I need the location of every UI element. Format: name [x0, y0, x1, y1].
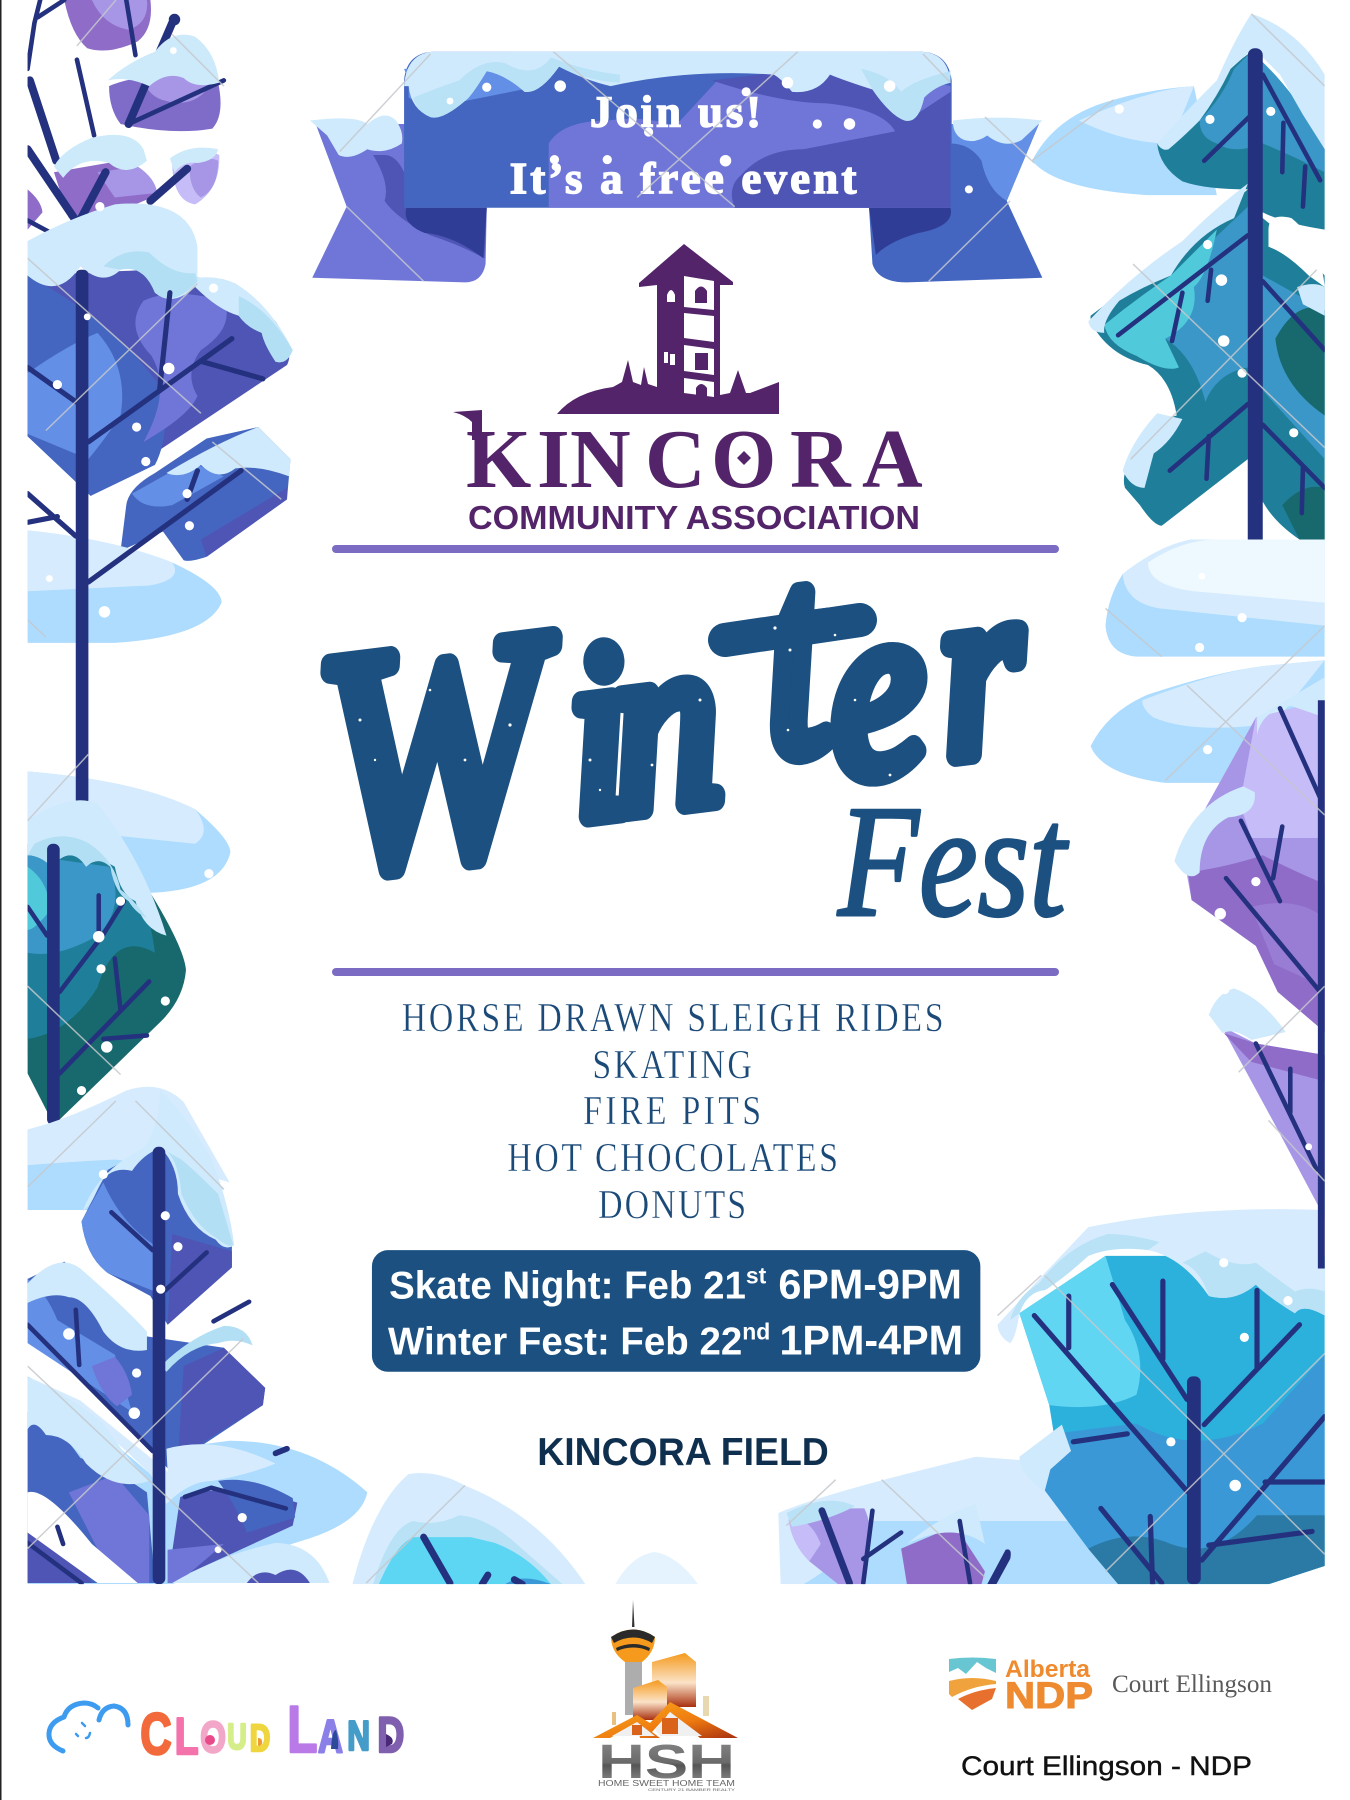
- tree: large blue branch tree: [28, 203, 293, 893]
- sponsor: Alberta NDP: [949, 1656, 1272, 1781]
- sponsor: Alberta NDP: NDP: [1005, 1675, 1093, 1716]
- tree: teal top right: [1032, 14, 1325, 558]
- title: Fest: Fest: [837, 772, 1069, 950]
- logo: Kincora tower: [557, 244, 779, 414]
- sponsor: Alberta NDP: Court Ellingson: [1112, 1671, 1272, 1698]
- tree: teal left: [28, 800, 186, 1125]
- icon: Calgary tower and houses: [593, 1600, 738, 1738]
- banner text: [510, 94, 857, 194]
- tree: purple right: [1174, 677, 1327, 1268]
- activities list: FIRE PITS: [583, 1088, 761, 1134]
- logo: KINCORA wordmark: COMMUNITY ASSOCIATION: [468, 499, 920, 536]
- panel: event dates: Winter Fest: Feb 22: [388, 1321, 742, 1364]
- sponsor: Cloud Land: U: [227, 1716, 247, 1757]
- activities list: HORSE DRAWN SLEIGH RIDES: [402, 995, 944, 1041]
- panel: event dates: nd: [742, 1319, 770, 1345]
- sponsor: Alberta NDP: Alberta: [1005, 1656, 1091, 1683]
- sponsor: Cloud Land: A: [318, 1710, 343, 1762]
- divider: bottom: [332, 968, 1059, 976]
- title: Winter: Winter: [305, 498, 1035, 941]
- sponsor: HSH Home Sweet Home Team: [593, 1600, 738, 1792]
- sponsor: Cloud Land: C: [140, 1702, 172, 1766]
- tree: purple low bottom right: [778, 1457, 1148, 1584]
- activities list: HOT CHOCOLATES: [507, 1135, 838, 1181]
- sponsor: Cloud Land: L: [287, 1693, 317, 1767]
- snow dots: [46, 47, 1312, 1553]
- activities list: DONUTS: [598, 1182, 746, 1228]
- tree: purple top left: [28, 0, 224, 238]
- activities list: [402, 995, 944, 1228]
- ribbon: banner: [310, 52, 1042, 282]
- icon: NDP shield: [949, 1658, 996, 1710]
- sponsor: Alberta NDP: Court Ellingson - NDP: [961, 1751, 1252, 1781]
- panel: event dates: 6PM-9PM: [778, 1261, 962, 1307]
- sponsor: HSH Home Sweet Home Team: HSH: [598, 1736, 735, 1789]
- title speckles: [348, 626, 986, 811]
- divider: top: [332, 545, 1059, 553]
- sponsor: Cloud Land: L: [175, 1706, 199, 1765]
- banner text: It’s a free event: [510, 153, 856, 203]
- icon: cloud: [49, 1703, 128, 1751]
- hill: bottom centre snow mound: [352, 1473, 698, 1584]
- tree: bright blue bottom right: [998, 1209, 1325, 1584]
- snow mounds: right side: [1091, 540, 1325, 783]
- sponsor: Cloud Land: N: [347, 1712, 370, 1759]
- sponsor: Cloud Land: O: [200, 1714, 226, 1762]
- sponsor: HSH Home Sweet Home Team: CENTURY 21 BAMBER REALTY: [648, 1787, 735, 1792]
- panel: event dates: st: [746, 1262, 767, 1288]
- banner text: Join us!: [590, 86, 761, 136]
- sponsor: HSH Home Sweet Home Team: HOME SWEET HOME TEAM: [598, 1779, 735, 1788]
- panel: event dates: Skate Night: Feb 21: [389, 1264, 746, 1307]
- logo: KINCORA wordmark: KINCORA: [466, 413, 923, 506]
- sponsor: Cloud Land: [49, 1693, 404, 1767]
- location: KINCORA FIELD: [537, 1431, 829, 1474]
- sponsor: Cloud Land: D: [250, 1718, 270, 1760]
- panel: event dates: [372, 1250, 980, 1372]
- tree: blue bottom left: [28, 1087, 367, 1584]
- activities list: SKATING: [592, 1042, 752, 1088]
- sponsor: Cloud Land: D: [377, 1708, 404, 1763]
- panel: event dates: 1PM-4PM: [779, 1318, 963, 1364]
